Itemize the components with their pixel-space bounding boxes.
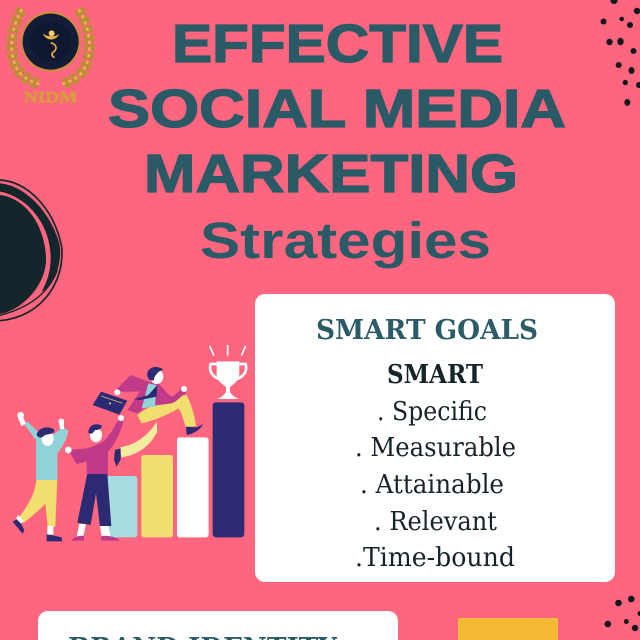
title: Strategies (200, 212, 491, 269)
decorative dots: top right (600, 0, 640, 106)
figure: leaping person (114, 367, 203, 467)
logo: NIDM laurel emblem (12, 9, 90, 107)
text block: smart list: . Measurable (355, 433, 516, 463)
panel: smart goals (255, 294, 615, 582)
figure: left person cheering (13, 412, 68, 541)
icon: briefcase (93, 392, 127, 415)
illustration: team climbing bar chart to trophy (13, 345, 246, 541)
title: SOCIAL MEDIA (108, 79, 566, 139)
text block: smart list: SMART (387, 360, 484, 390)
logo: NIDM laurel emblem: NIDM (24, 90, 78, 107)
decorative dots: bottom right (604, 596, 640, 631)
title: EFFECTIVE (172, 14, 503, 74)
bar chart steps (106, 402, 244, 537)
heading: smart goals: SMART GOALS (316, 315, 538, 346)
text block: smart list: . Specific (377, 397, 487, 427)
icon: trophy (210, 345, 246, 399)
figure: middle person (65, 415, 124, 541)
text block: smart list: . Relevant (374, 507, 498, 537)
panel: brand identity (38, 611, 398, 640)
text block: smart list: .Time-bound (355, 543, 515, 573)
text block: smart list: . Attainable (360, 470, 504, 500)
decorative scribble circle (0, 180, 62, 321)
title: MARKETING (144, 144, 518, 204)
yellow block (458, 618, 558, 640)
title (108, 14, 566, 269)
text block: smart list (355, 360, 516, 573)
